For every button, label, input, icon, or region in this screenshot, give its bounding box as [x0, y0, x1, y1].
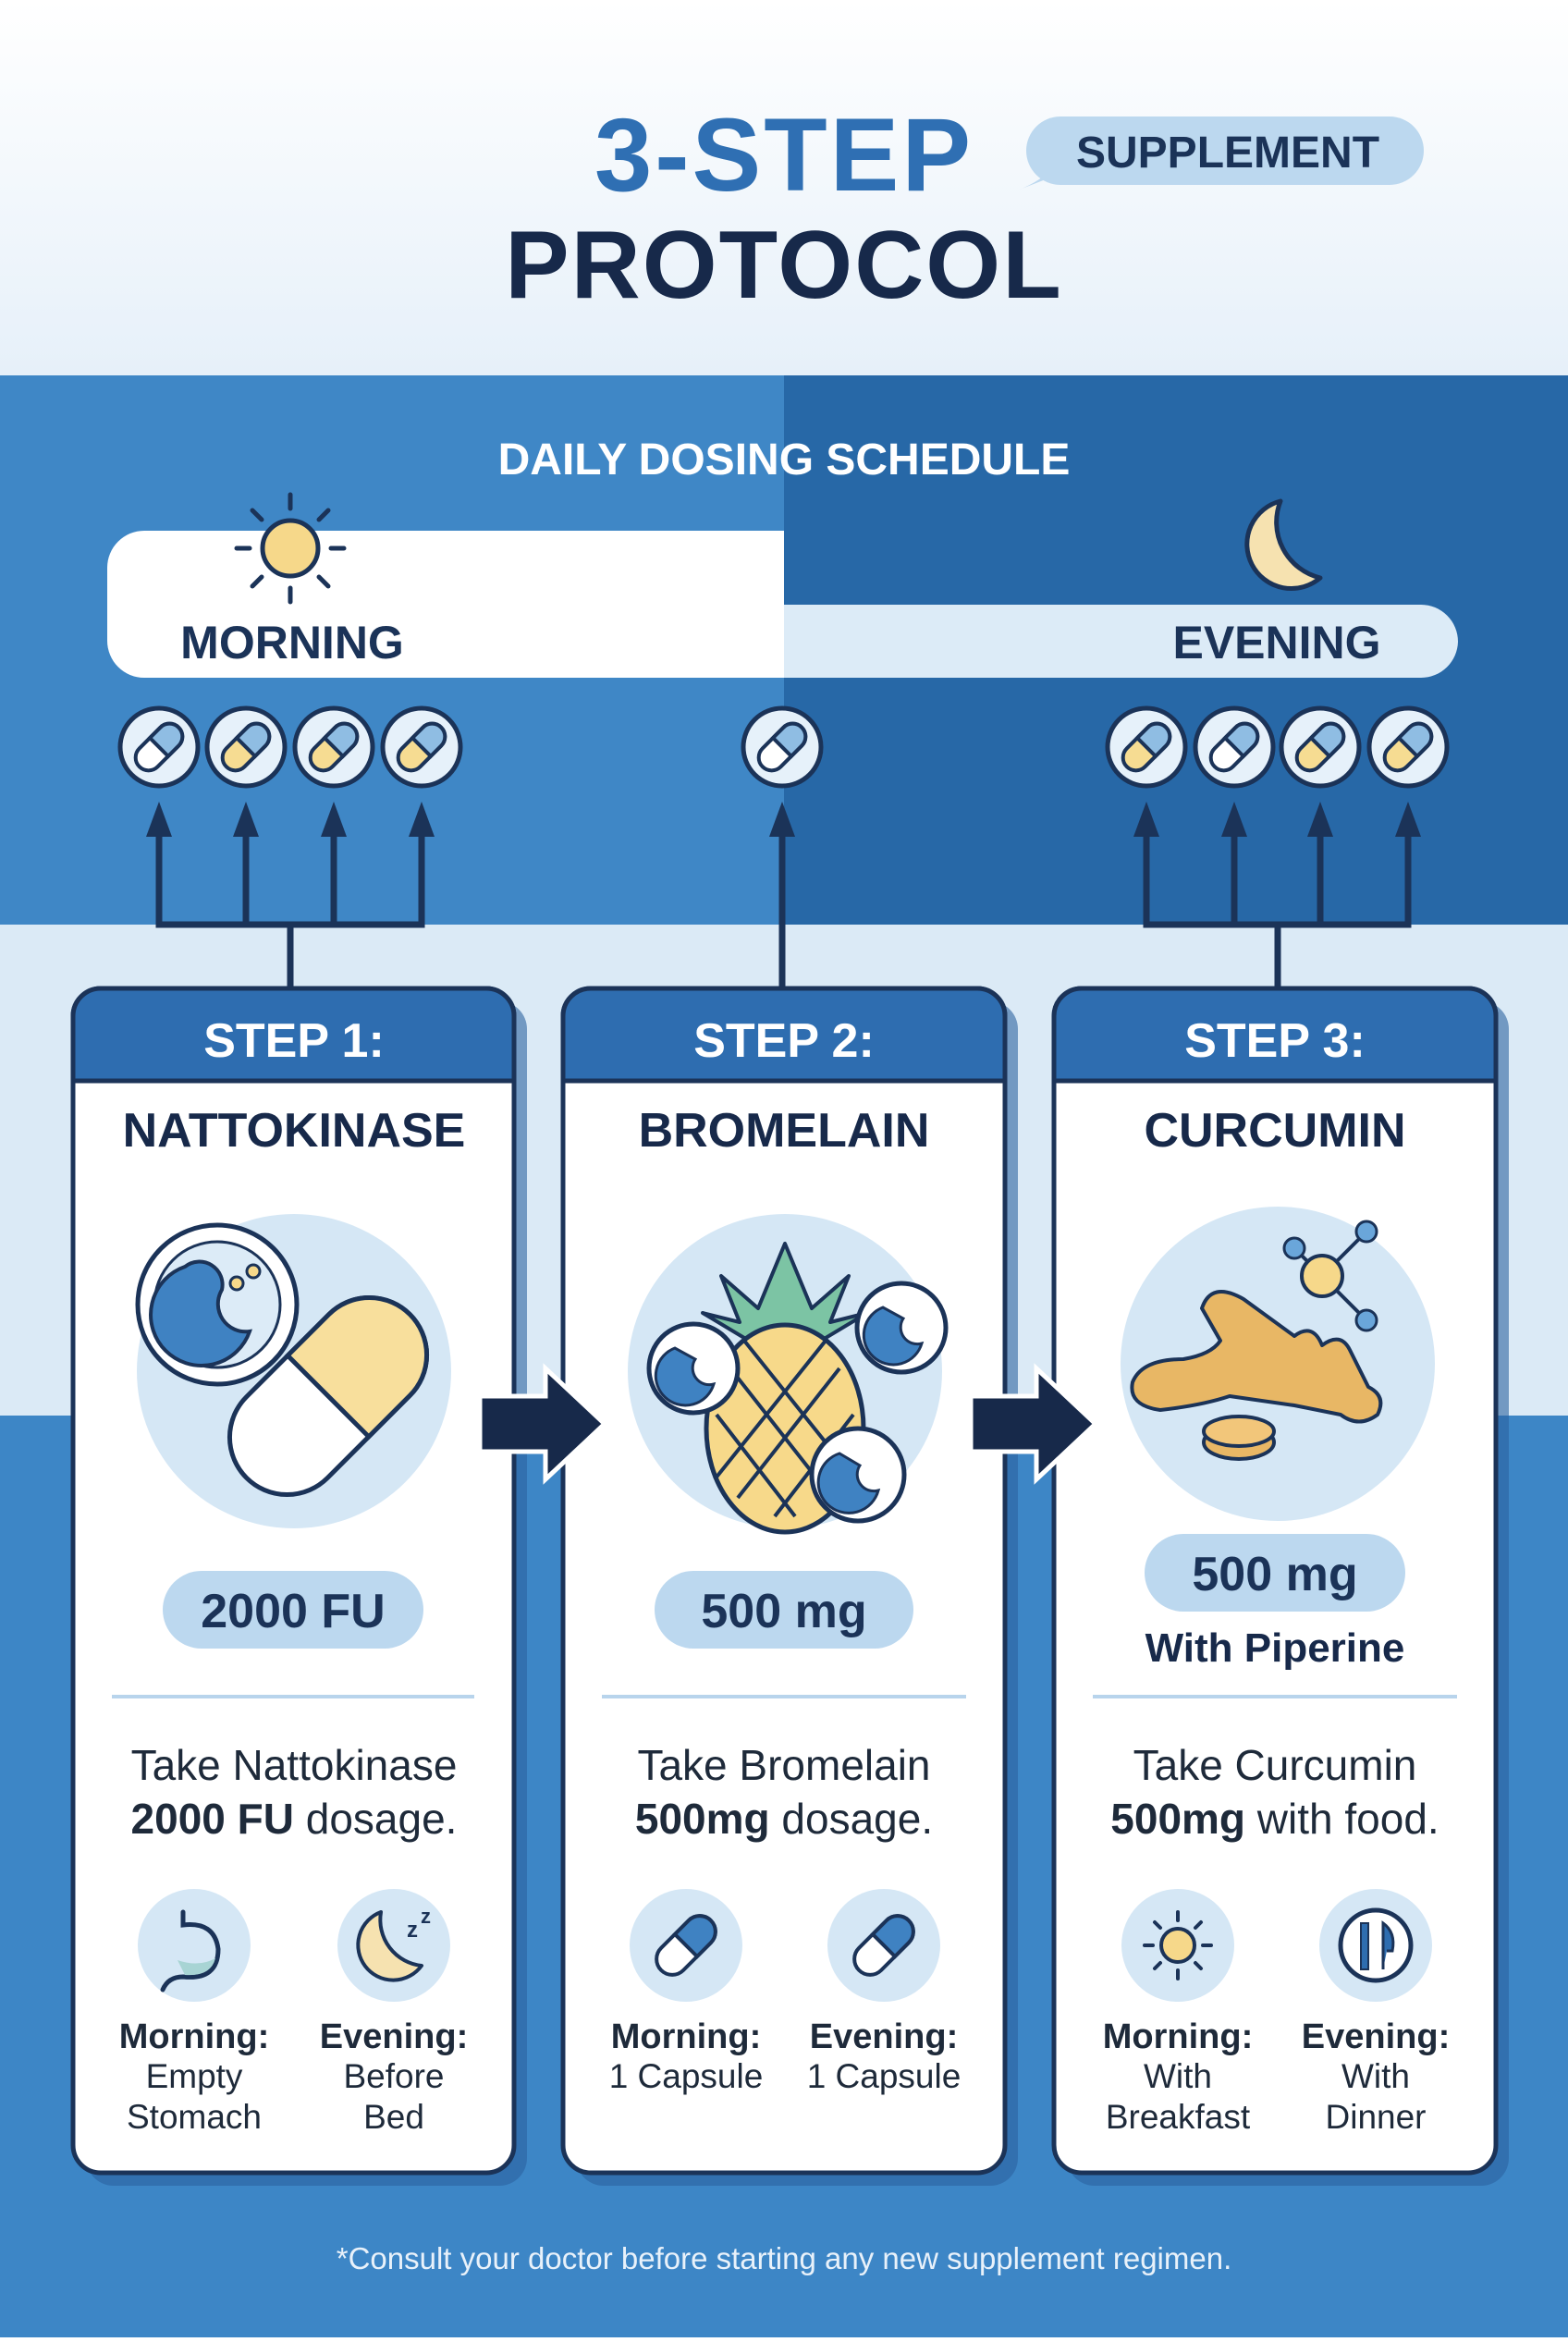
- panel: step 2 bromelain: 1 Capsule: [609, 2057, 763, 2095]
- panel: step 3 curcumin: 500mg with food.: [1110, 1795, 1439, 1843]
- schedule heading: DAILY DOSING SCHEDULE: [498, 435, 1070, 484]
- icon: capsule evening: [827, 1889, 940, 2002]
- badge: supplement: SUPPLEMENT: [1076, 129, 1379, 178]
- arrow: step 2 to step 3: [971, 1368, 1096, 1479]
- icon: plate dinner: [1319, 1889, 1432, 2002]
- panel: step 3 curcumin: Breakfast: [1106, 2098, 1251, 2136]
- pills morning: [120, 708, 460, 786]
- description: Take Nattokinase: [131, 1741, 457, 1789]
- illustration: nattokinase: [137, 1214, 451, 1528]
- icon: stomach: [138, 1889, 251, 2002]
- arrows: schedule connectors: [146, 802, 1421, 989]
- panel: step 3 curcumin: Evening:: [1302, 2017, 1450, 2056]
- timeline bar: evening: [784, 605, 1458, 678]
- panel: step 3 curcumin: STEP 3:: [1184, 1014, 1366, 1068]
- panel: step 1 nattokinase: 2000 FU dosage.: [131, 1795, 457, 1843]
- timeline bar: morning: MORNING: [180, 617, 404, 668]
- title: 3-STEP: [594, 97, 974, 213]
- icon: moon: [1247, 501, 1320, 589]
- dosage badge: [163, 1571, 423, 1649]
- title: PROTOCOL: [505, 212, 1063, 319]
- panel: step 3 curcumin: Take Curcumin: [1133, 1741, 1416, 1789]
- icon: sun: [237, 495, 344, 602]
- arrow: step 1 to step 2: [480, 1368, 605, 1479]
- icon: sun breakfast: [1121, 1889, 1234, 2002]
- panel: step 2 bromelain: BROMELAIN: [639, 1104, 929, 1158]
- pills evening: [1108, 708, 1447, 786]
- panel: step 2 bromelain: 1 Capsule: [807, 2057, 961, 2095]
- panel: step 3 curcumin: [1054, 988, 1509, 2186]
- panel: step 1 nattokinase: STEP 1:: [203, 1014, 385, 1068]
- panel: step 3 curcumin: 500 mg: [1192, 1548, 1358, 1601]
- panel: step 3 curcumin: With Piperine: [1145, 1625, 1404, 1671]
- panel: step 3 curcumin: Morning:: [1103, 2017, 1253, 2056]
- panel: step 2 bromelain: Evening:: [810, 2017, 958, 2056]
- illustration: turmeric: [1121, 1207, 1435, 1521]
- panel: step 2 bromelain: Take Bromelain: [637, 1741, 931, 1789]
- panel: step 1 nattokinase: NATTOKINASE: [123, 1104, 465, 1158]
- pill middle: [743, 708, 821, 786]
- panel: step 3 curcumin: With: [1341, 2057, 1410, 2095]
- header background: [0, 0, 1568, 375]
- timeline bar: morning: [107, 531, 784, 678]
- panel: step 1 nattokinase: Evening:: [320, 2017, 468, 2056]
- icon: sleeping moon: [337, 1889, 450, 2002]
- panel: step 3 curcumin: Dinner: [1326, 2098, 1426, 2136]
- panel: step 1 nattokinase: Empty: [146, 2057, 243, 2095]
- icon: capsule morning: [630, 1889, 742, 2002]
- icon: sleeping moon: z: [407, 1918, 418, 1943]
- footer disclaimer: *Consult your doctor before starting any new supplement regimen.: [337, 2241, 1231, 2275]
- panel: step 1 nattokinase: Morning:: [119, 2017, 269, 2056]
- illustration: pineapple: [628, 1214, 946, 1532]
- panel: step 2 bromelain: [563, 988, 1018, 2186]
- badge: supplement: [1017, 116, 1424, 190]
- timeline bar: evening: EVENING: [1172, 617, 1381, 668]
- icon: sleeping moon: z: [421, 1905, 431, 1928]
- panel: step 3 curcumin: With: [1144, 2057, 1212, 2095]
- panel: step 1 nattokinase: Before: [343, 2057, 445, 2095]
- panel: step 1 nattokinase: 2000 FU: [201, 1585, 386, 1638]
- panel: step 3 curcumin: CURCUMIN: [1144, 1104, 1406, 1158]
- panel: step 1 nattokinase: [73, 988, 527, 2186]
- schedule band: [0, 375, 784, 925]
- panel: step 2 bromelain: Morning:: [611, 2017, 761, 2056]
- panel: step 2 bromelain: 500 mg: [701, 1585, 867, 1638]
- panel: step 1 nattokinase: Stomach: [127, 2098, 262, 2136]
- panel: step 1 nattokinase: Bed: [363, 2098, 424, 2136]
- panel: step 2 bromelain: STEP 2:: [693, 1014, 875, 1068]
- title: [505, 97, 1063, 319]
- panel: step 2 bromelain: 500mg dosage.: [635, 1795, 933, 1843]
